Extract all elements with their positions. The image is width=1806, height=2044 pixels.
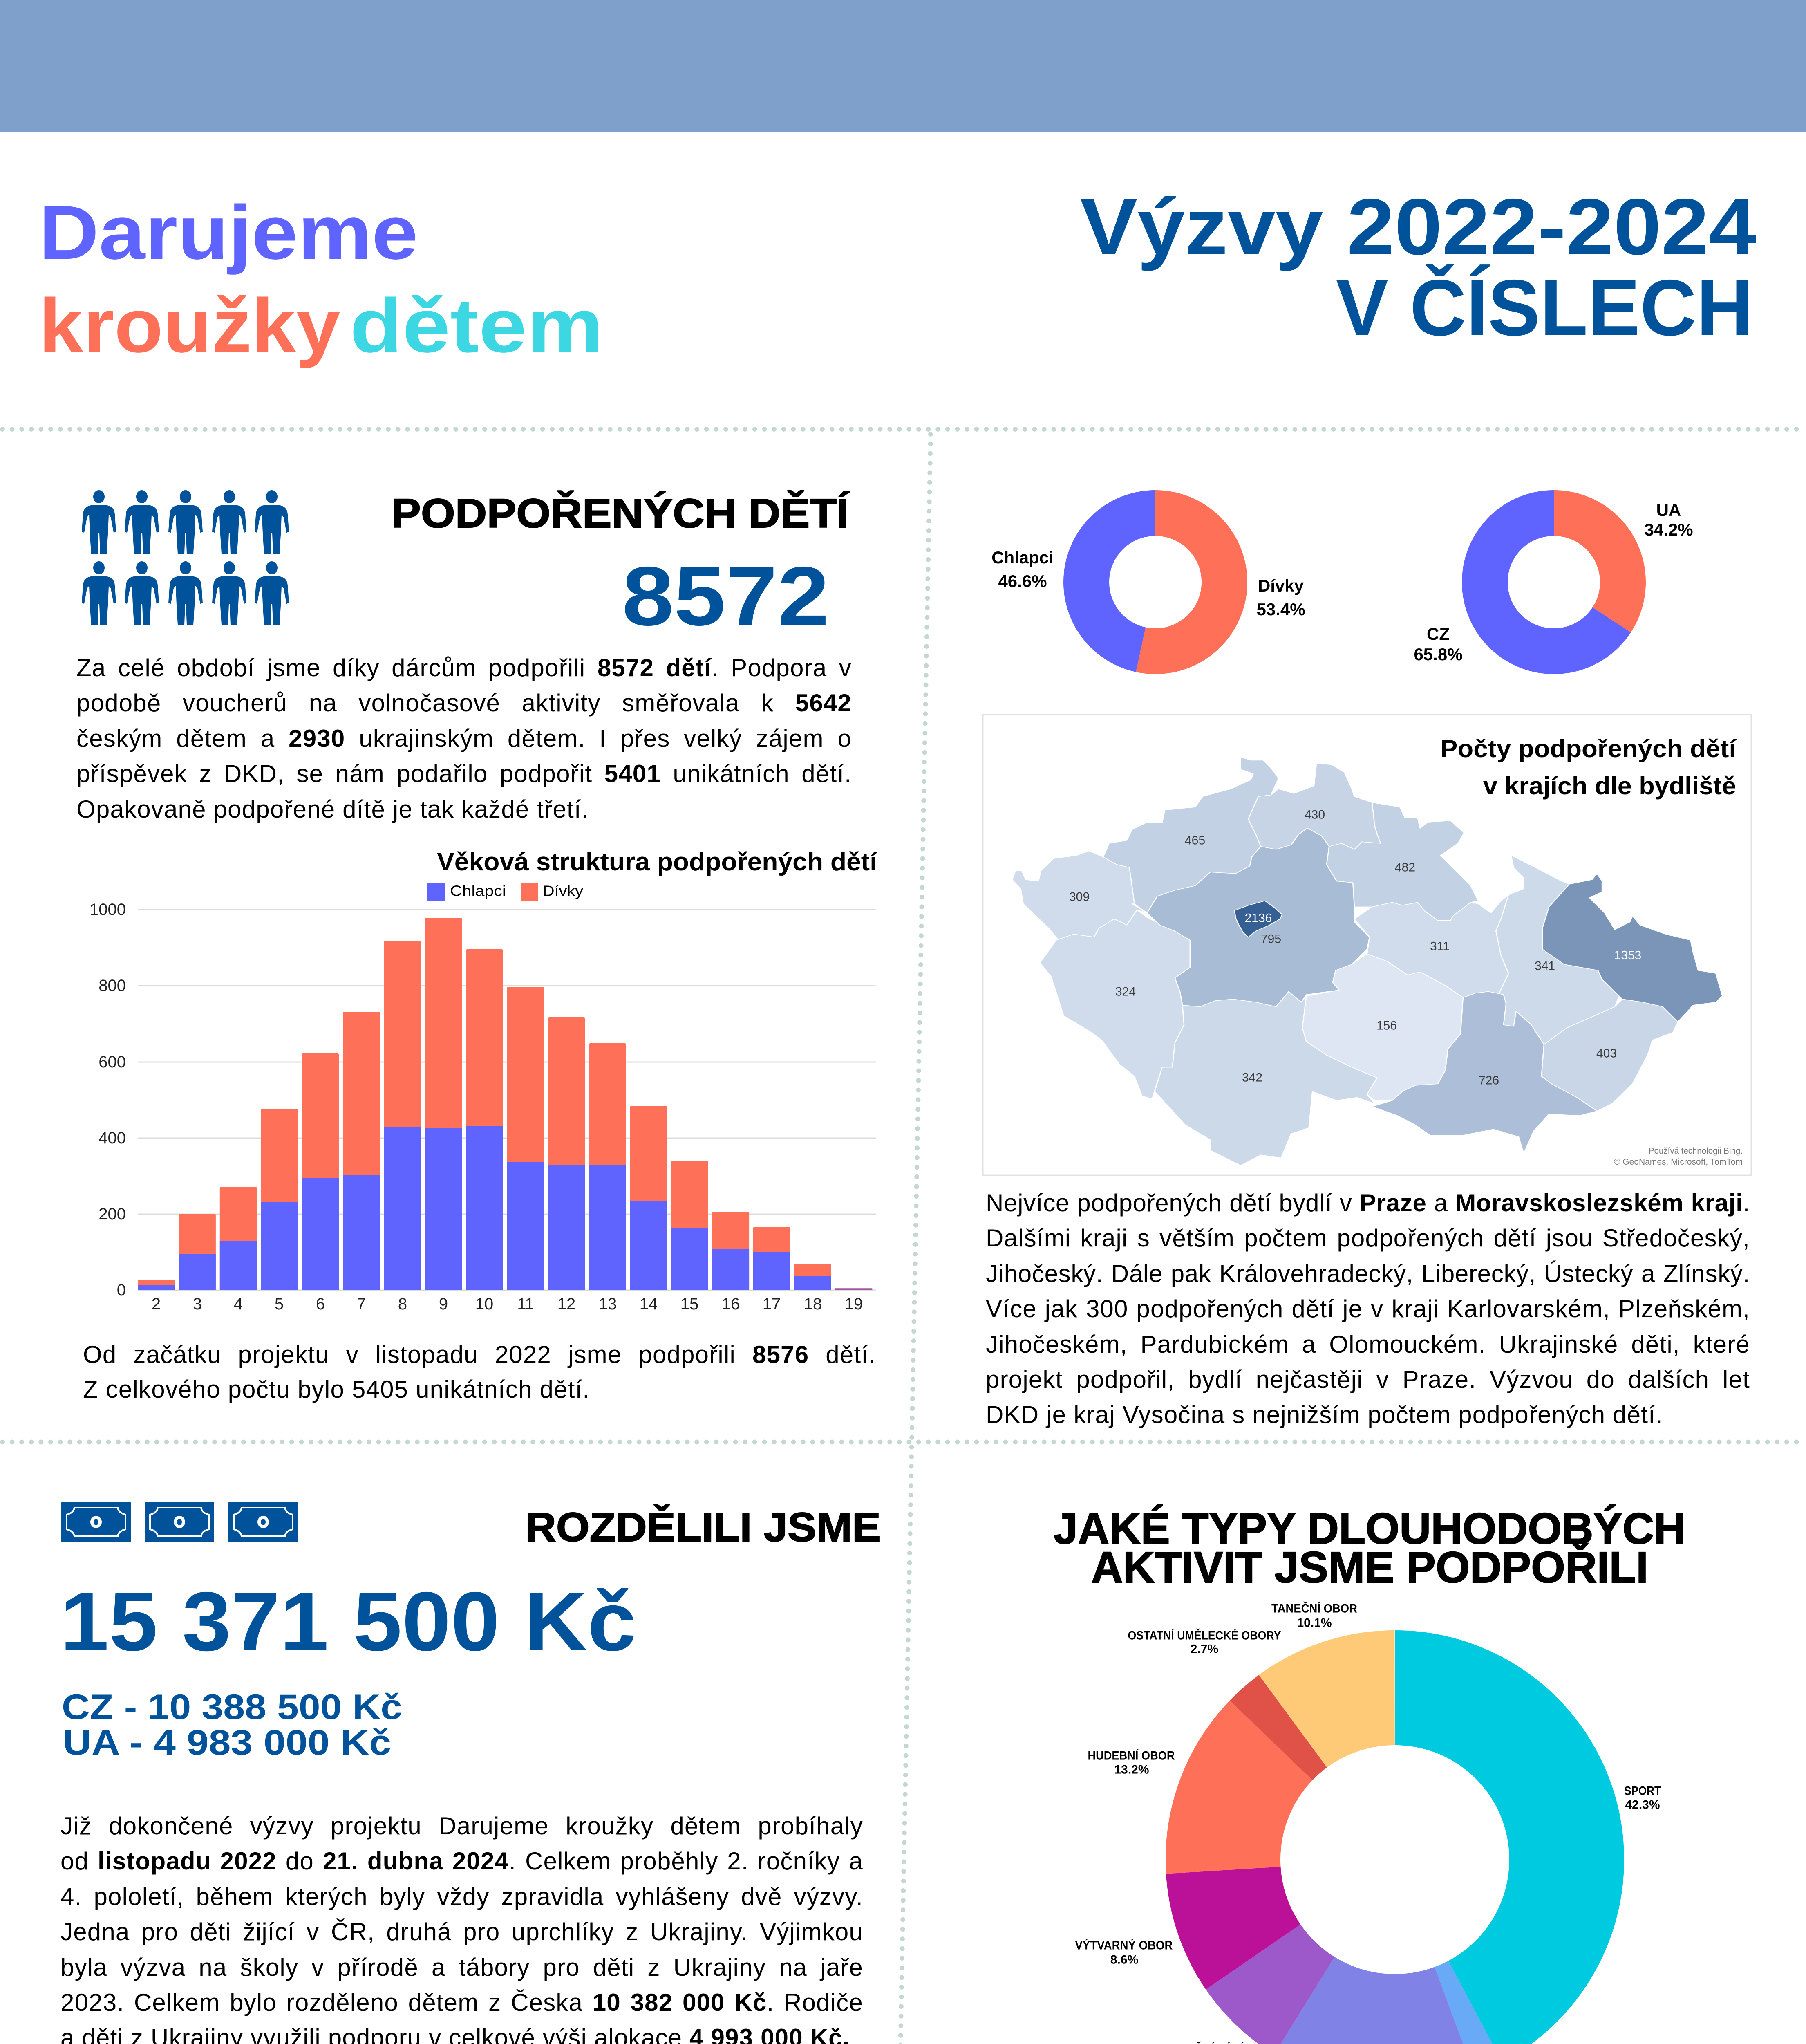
x axis labels: 14 [640, 1295, 658, 1313]
map title: Počty podpořených dětí [1440, 735, 1737, 762]
panel: supported children [82, 490, 850, 643]
text: map commentary: Jihočeský. Dále pak Královehradecký, Liberecký, Ústecký a Zlínský. [986, 1260, 1750, 1287]
x axis labels: 2 [152, 1295, 161, 1313]
map value labels: 482 [1395, 861, 1415, 874]
donut labels: TANEČNÍ OBOR [1271, 1602, 1357, 1616]
text: completed challenges: 2023. Celkem bylo rozděleno dětem z Česka 10 382 000 Kč. Rodiče [60, 1989, 863, 2016]
map value labels [1069, 808, 1641, 1087]
x axis labels: 15 [680, 1295, 698, 1313]
CZ and UA amounts: UA - 4 983 000 Kč [63, 1723, 391, 1762]
y axis labels: 1000 [90, 901, 126, 919]
map value labels: 156 [1376, 1019, 1397, 1033]
text: map commentary [986, 1186, 1750, 1433]
text: completed challenges: Jedna pro děti žijící v ČR, druhá pro uprchlíky z Ukrajiny. Výjimkou [60, 1918, 863, 1945]
text: map commentary: Nejvíce podpořených dětí bydlí v Praze a Moravskoslezském kraji. [986, 1189, 1750, 1217]
y axis labels: 0 [117, 1281, 126, 1299]
CZ and UA amounts: CZ - 10 388 500 Kč [62, 1688, 402, 1727]
heading: activity types: JAKÉ TYPY DLOUHODOBÝCH [1054, 1504, 1685, 1553]
chart title: Věková struktura podpořených dětí [437, 848, 878, 876]
donut labels: 10.1% [1297, 1616, 1332, 1629]
map attribution [1614, 1146, 1743, 1167]
map value labels: 311 [1430, 939, 1450, 953]
donut chart: CZ vs UA children: 34.2% [1644, 520, 1693, 539]
chart legend [427, 882, 583, 901]
logo: Darujeme kroužky dětem: dětem [350, 283, 603, 368]
x axis labels: 6 [316, 1295, 325, 1313]
map value labels: 726 [1479, 1074, 1499, 1087]
donut labels: 42.3% [1625, 1798, 1660, 1812]
map title [1440, 735, 1737, 800]
map value labels: 403 [1596, 1047, 1617, 1060]
CZ and UA amounts [62, 1688, 402, 1762]
x axis labels: 12 [557, 1295, 575, 1313]
text: map commentary: Jihočeském, Pardubickém a Olomouckém. Ukrajinské děti, které [986, 1331, 1750, 1358]
donut labels: HUDEBNÍ OBOR [1088, 1749, 1175, 1763]
x axis labels: 4 [234, 1295, 243, 1313]
chart legend: Chlapci [450, 882, 506, 899]
icons: banknotes [61, 1502, 298, 1542]
logo: Darujeme kroužky dětem: kroužky [39, 283, 340, 368]
map value labels: 430 [1305, 808, 1325, 822]
x axis labels: 3 [193, 1295, 202, 1313]
icon: ten people [82, 490, 289, 625]
map value labels: 341 [1535, 959, 1555, 973]
donut chart: CZ vs UA children [1414, 500, 1693, 664]
text: map commentary: projekt podpořil, bydlí nejčastěji v Praze. Výzvou do dalších let [986, 1366, 1750, 1393]
donut chart: CZ vs UA children: UA [1656, 500, 1681, 520]
donut chart: CZ vs UA children: CZ [1427, 624, 1450, 643]
text: completed challenges: Již dokončené výzvy projektu Darujeme kroužky dětem probíhaly [60, 1812, 863, 1840]
text: map commentary: Více jak 300 podpořených dětí je v kraji Karlovarském, Plzeňském, [986, 1295, 1750, 1322]
map value labels: 795 [1261, 932, 1281, 946]
dotted dividers [2, 429, 1806, 2044]
text: supported children: českým dětem a 2930 ukrajinským dětem. I přes velký zájem o [76, 725, 852, 752]
panel: distributed money [60, 1502, 881, 2044]
donut labels: 8.6% [1110, 1953, 1138, 1966]
donut chart: boys vs girls: Dívky [1258, 576, 1304, 595]
map value labels: 1353 [1614, 948, 1641, 962]
y axis labels [90, 901, 126, 1299]
map of Czech regions [1012, 757, 1722, 1165]
bar chart: age structure [90, 848, 878, 1313]
x axis labels [152, 1295, 863, 1313]
text: supported children: Za celé období jsme díky dárcům podpořili 8572 dětí. Podpora v [76, 654, 852, 681]
text: completed challenges: 4. pololetí, během kterých byly vždy zpravidla vyhlášeny dvě výzvy. [60, 1883, 863, 1910]
text: project totals: Od začátku projektu v listopadu 2022 jsme podpořili 8576 dětí. [83, 1341, 876, 1368]
donut labels: 13.2% [1114, 1763, 1149, 1777]
x axis labels: 8 [398, 1295, 407, 1313]
donut chart: boys vs girls: 53.4% [1256, 600, 1305, 619]
logo: Darujeme kroužky dětem: Darujeme [39, 190, 418, 275]
donut chart: boys vs girls [991, 513, 1305, 651]
map value labels: 324 [1115, 985, 1136, 998]
bars: girls [138, 918, 872, 1290]
text: completed challenges: od listopadu 2022 do 21. dubna 2024. Celkem proběhly 2. ročníky a [60, 1847, 863, 1875]
map value labels: 2136 [1245, 912, 1272, 925]
text: completed challenges: byla výzva na školy v přírodě a tábory pro děti z Ukrajiny na jaře [60, 1954, 863, 1981]
map value labels: 465 [1185, 834, 1205, 847]
x axis labels: 10 [475, 1295, 493, 1313]
x axis labels: 16 [722, 1295, 740, 1313]
y axis labels: 600 [98, 1053, 126, 1071]
text: project totals: Z celkového počtu bylo 5405 unikátních dětí. [83, 1376, 590, 1403]
x axis labels: 19 [845, 1295, 863, 1313]
text: map commentary: DKD je kraj Vysočina s nejnižším počtem podpořených dětí. [986, 1401, 1663, 1428]
chart legend: Dívky [543, 882, 583, 899]
x axis labels: 7 [357, 1295, 366, 1313]
text: supported children: příspěvek z DKD, se nám podařilo podpořit 5401 unikátních dětí. [76, 760, 852, 787]
map attribution: Používá technologii Bing. [1649, 1146, 1743, 1156]
y axis labels: 800 [98, 977, 126, 995]
y axis labels: 200 [98, 1205, 126, 1223]
big number 8572: 8572 [622, 549, 829, 643]
donut labels [1075, 1602, 1661, 2044]
text: map commentary: Dalšími kraji s větším počtem podpořených dětí jsou Středočeský, [986, 1224, 1750, 1252]
text: supported children [76, 650, 852, 827]
map title: v krajích dle bydliště [1483, 772, 1736, 800]
donut chart: CZ vs UA children: 65.8% [1414, 645, 1463, 664]
heading: activity types: AKTIVIT JSME PODPOŘILI [1091, 1542, 1648, 1592]
x axis labels: 17 [763, 1295, 781, 1313]
donut labels: VÝTVARNÝ OBOR [1075, 1939, 1173, 1952]
logo: Darujeme kroužky dětem [39, 190, 603, 368]
x axis labels: 18 [804, 1295, 822, 1313]
x axis labels: 5 [275, 1295, 284, 1313]
donut labels: 2.7% [1191, 1643, 1218, 1656]
donut chart: activity types [1075, 1602, 1661, 2044]
map attribution: © GeoNames, Microsoft, TomTom [1614, 1157, 1743, 1167]
donut chart: boys vs girls: Chlapci [991, 548, 1054, 567]
main title: V ČÍSLECH [1336, 263, 1753, 352]
map value labels: 342 [1242, 1071, 1262, 1084]
donut labels: SPORT [1624, 1784, 1661, 1798]
heading: distributed: ROZDĚLILI JSME [525, 1504, 881, 1550]
map value labels: 309 [1069, 890, 1090, 903]
donut chart: boys vs girls: 46.6% [998, 572, 1047, 591]
x axis labels: 11 [517, 1295, 534, 1313]
main title: Výzvy 2022-2024 [1080, 182, 1757, 271]
big amount: 15 371 500 Kč [60, 1575, 636, 1668]
text: supported children: podobě voucherů na volnočasové aktivity směřovala k 5642 [76, 689, 852, 717]
text: supported children: Opakovaně podpořené dítě je tak každé třetí. [76, 796, 589, 823]
heading: supported children: PODPOŘENÝCH DĚTÍ [392, 491, 850, 536]
main title [1080, 182, 1757, 352]
y axis labels: 400 [98, 1129, 126, 1147]
bars: boys [138, 1126, 872, 1290]
text: project totals [83, 1337, 876, 1407]
x axis labels: 13 [599, 1295, 617, 1313]
donut labels: OSTATNÍ UMĚLECKÉ OBORY [1128, 1629, 1281, 1643]
text: completed challenges [60, 1809, 863, 2044]
panel: map of regions [983, 715, 1751, 1175]
top colour band [0, 0, 1806, 132]
heading: activity types [1054, 1504, 1685, 1592]
x axis labels: 9 [439, 1295, 448, 1313]
